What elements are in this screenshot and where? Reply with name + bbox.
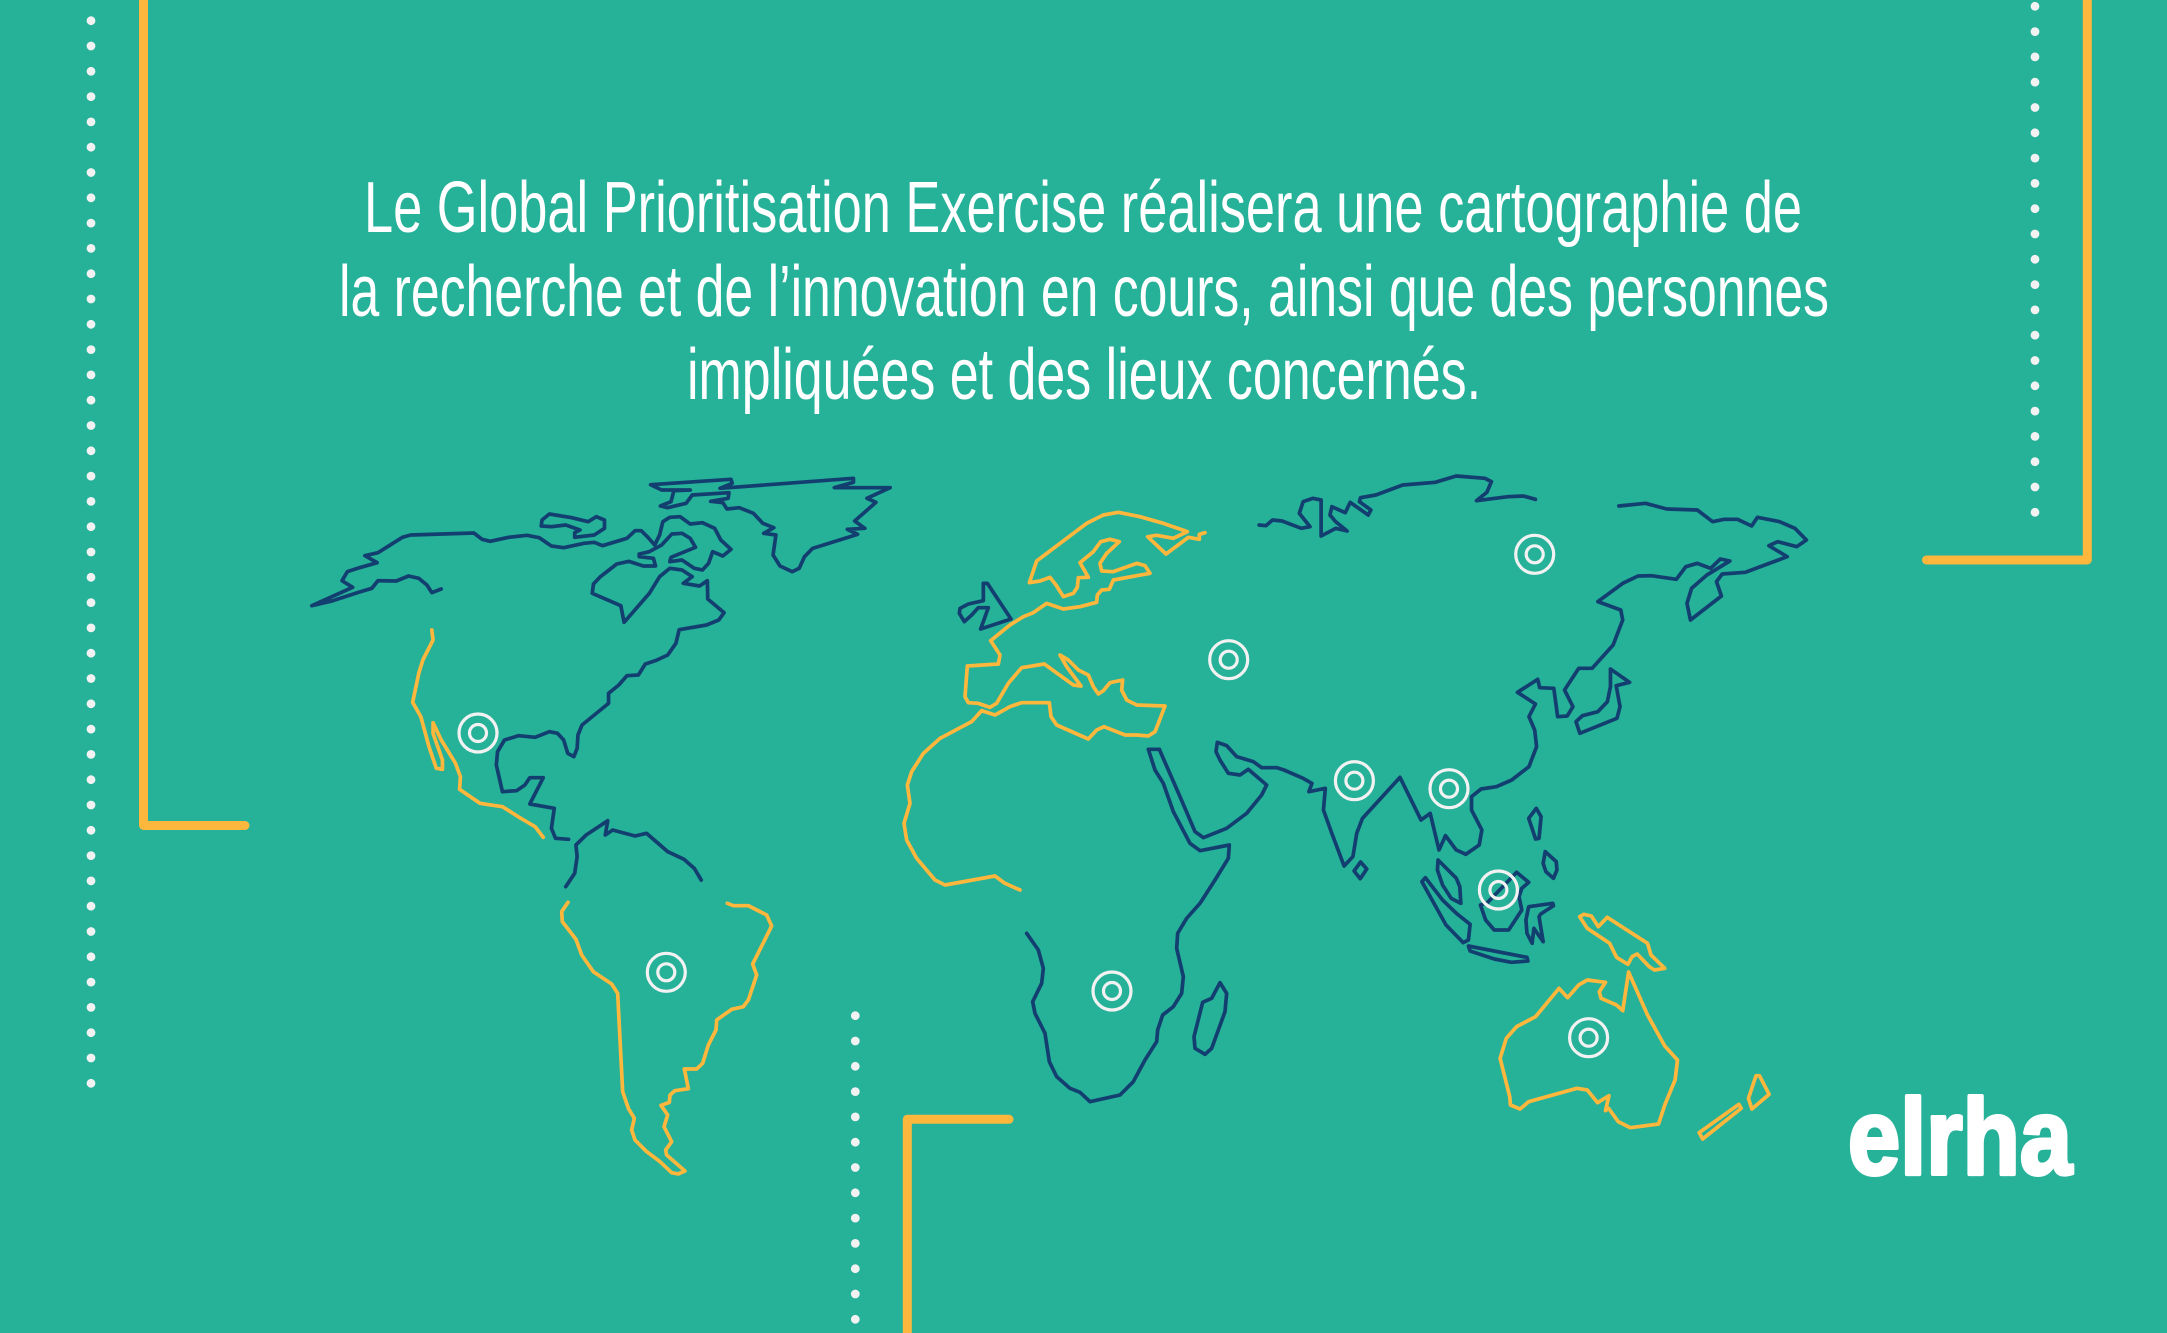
bottom dotted line: [851, 1016, 860, 1325]
Red Sea and East Africa coast: [1148, 749, 1229, 880]
heading text: [339, 168, 1829, 415]
North America orange west coast: [413, 630, 543, 837]
location marker: Mexico: [459, 714, 497, 752]
location marker: Borneo: [1479, 871, 1517, 909]
location marker: Siberia: [1516, 535, 1554, 573]
Northern Russia coast: [1259, 476, 1535, 536]
Southern Africa coast: [1027, 880, 1215, 1102]
right dotted line: [2031, 6, 2039, 515]
Arctic island: [541, 514, 604, 537]
Arabian Peninsula: [1159, 742, 1277, 838]
Madagascar: [1194, 983, 1227, 1054]
bottom yellow bracket: [907, 1119, 1009, 1333]
location marker: Central Asia: [1210, 641, 1248, 679]
South and East Asia coast: [1277, 503, 1806, 866]
location marker: India: [1335, 762, 1373, 800]
location marker: Southern Africa: [1093, 972, 1131, 1010]
left dotted line: [87, 21, 95, 1085]
left yellow bracket: [144, 0, 245, 826]
location marker: China: [1430, 770, 1468, 808]
elrha logo: elrha: [1848, 1076, 2073, 1197]
location marker: Australia: [1570, 1019, 1608, 1057]
Greenland: [651, 478, 890, 572]
South America orange coast: [562, 902, 772, 1174]
right yellow bracket: [1926, 0, 2087, 560]
North America navy coast: [312, 517, 731, 839]
Southeast Asia islands: [1354, 808, 1557, 962]
Oceania orange coasts: [1500, 914, 1769, 1139]
heading text: impliquées et des lieux concernés.: [687, 335, 1481, 415]
Europe and North Africa orange coast: [904, 512, 1205, 890]
Japan: [1576, 669, 1630, 733]
North of South America navy coast: [566, 821, 701, 887]
United Kingdom: [959, 583, 1011, 629]
location marker: South America: [647, 953, 685, 991]
world map: [312, 476, 1806, 1174]
